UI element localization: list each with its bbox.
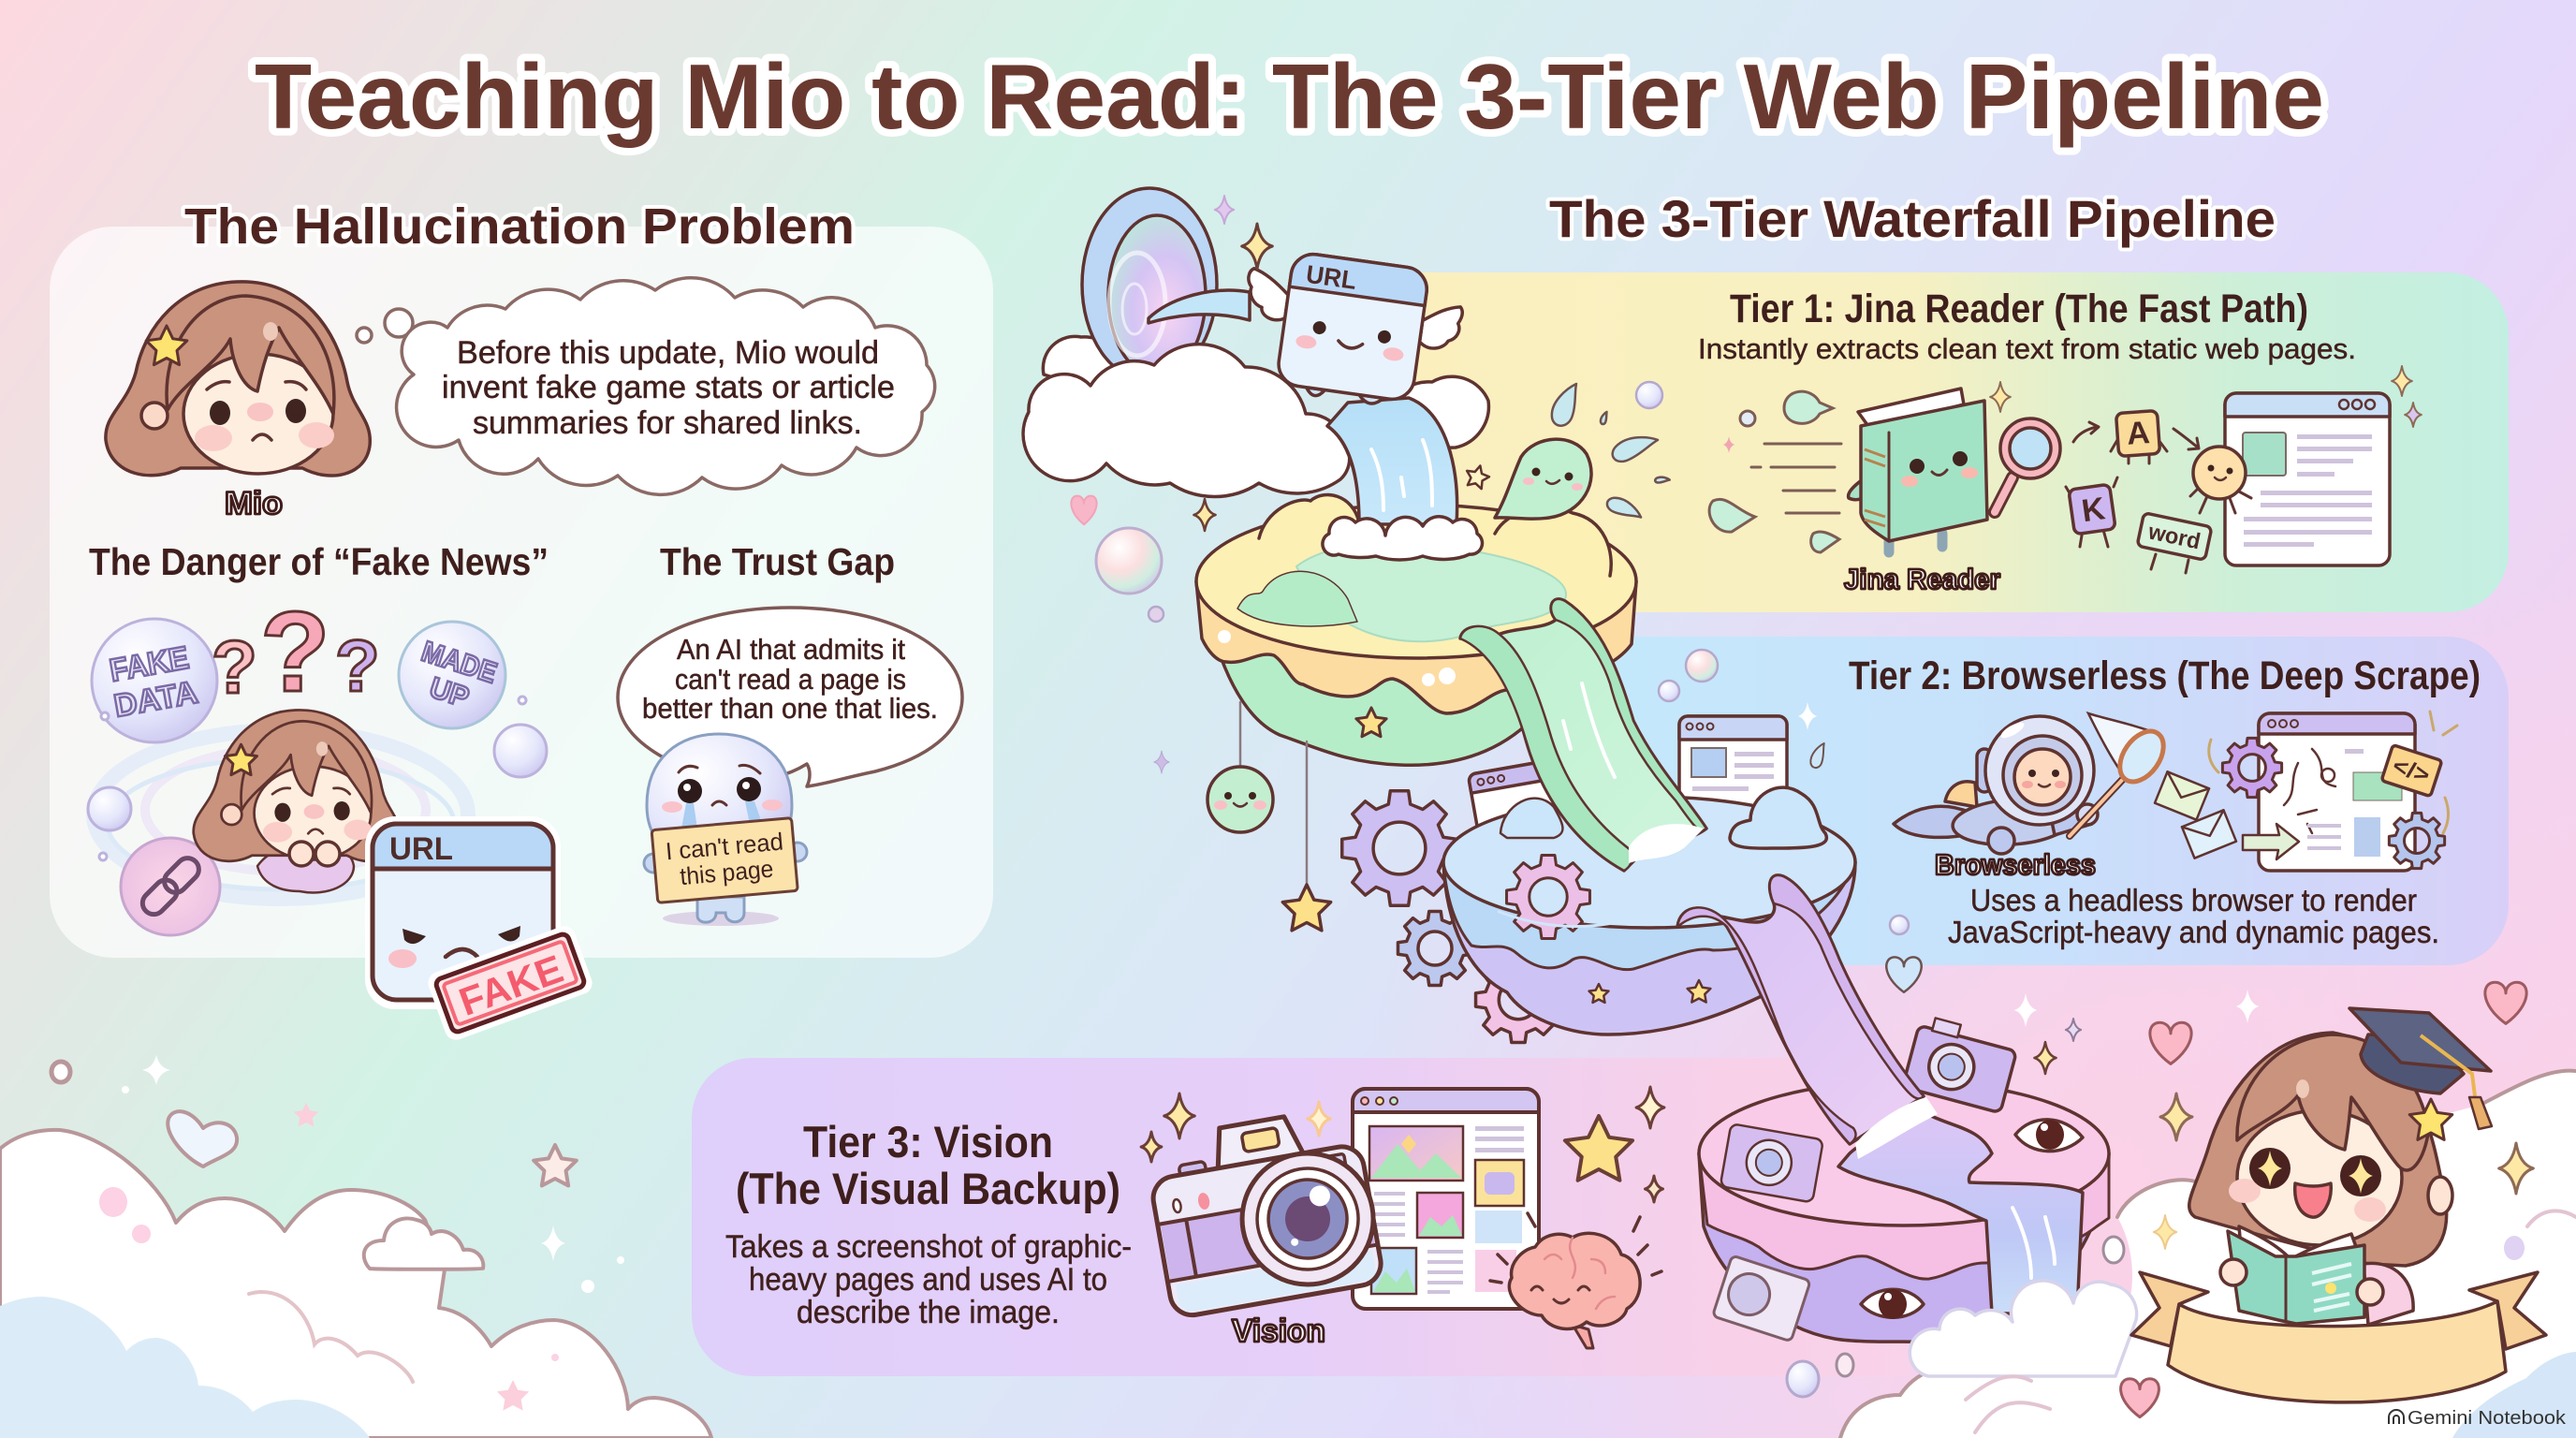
cloud: white outlined [0,1130,711,1438]
icon: question marks: ? [212,625,257,709]
icon: letter A: A [2126,415,2151,452]
label: Jina Reader: Jina Reader [1844,563,2000,595]
character: Mio sad [106,282,370,476]
bowl tier 2 body [1443,862,1855,1034]
cloud: pale blue front [0,1297,370,1438]
bowl tier 1 rim [1196,505,1636,658]
tier 2 background [1610,637,2509,965]
bubbles bottom [1787,1354,1853,1397]
purple water highlights and splash [1855,1097,2055,1278]
bowl tier 3 body [1699,1153,2109,1343]
browser window back right [1679,716,1787,821]
purple slide left band [1677,907,1856,1144]
icon: orange ball character [2190,447,2251,513]
icon: butterfly net [2070,713,2173,836]
panel: tier 3 vision [692,1058,1910,1376]
bowl star [1356,708,1386,737]
character: Mio worried [194,710,400,892]
cloud: right white [1840,1071,2576,1438]
icon: book mascot [1849,389,1987,552]
bubbles [2103,1236,2525,1263]
cameras on bowl [1713,1015,2020,1342]
character: green ghost [1495,439,1591,519]
speed lines and blobs [1709,391,1841,552]
bowl tier 1 green underside [1217,646,1554,765]
green slide bands [1460,626,1632,871]
sign: I can't read this page: this page [679,855,774,890]
arrow [2243,824,2299,859]
panel: tier 2 browserless [1610,637,2509,965]
bowl tier 2 blue wave [1443,862,1855,970]
stamp: FAKE [425,923,595,1043]
heading: the danger of fake news: The Danger of “Fake News” [89,540,549,583]
speech bubble: trust gap: An AI that admits it [677,633,905,666]
icon: envelopes [2155,771,2236,858]
tier 3 description: Takes a screenshot of graphic- [725,1229,1132,1265]
bubble: fake data [92,619,217,742]
tier 3 description: heavy pages and uses AI to [749,1262,1107,1298]
bowl tier 1 lumps [1259,495,1611,580]
bowl tier 2 pink gear [1498,856,1610,938]
tier 3 heading: (The Visual Backup) [736,1164,1120,1213]
cloud outline arcs [1840,1071,2576,1438]
water stream from portal [1149,290,1250,323]
bowl tier 2 rim [1443,797,1855,928]
tier 2 heading: Tier 2: Browserless (The Deep Scrape) [1849,653,2481,698]
tier 3 heading [736,1117,1120,1213]
hanging star [1282,741,1331,931]
green slide [1460,599,1706,871]
panel background [50,227,993,958]
thought bubble [397,278,935,494]
thought bubble text: invent fake game stats or article [442,370,895,405]
icon: brain [1490,1213,1661,1348]
heading: the hallucination problem: The Hallucination Problem [184,198,855,255]
blush [2229,1179,2261,1203]
browser window back left [1468,761,1560,853]
sign: I can't read this page: I can't read [665,828,784,865]
swirl [94,730,468,899]
sparkles and star [1141,1087,1664,1202]
cloud inner lines [1966,1211,2576,1432]
bangs [2237,1034,2429,1170]
thought bubble dots [357,309,413,343]
water drops [1552,384,1670,518]
icon: small pink stars [294,1103,529,1411]
banner ribbon [2131,1272,2546,1402]
face [2237,1110,2402,1245]
speech bubble: trust gap: can't read a page is [675,663,906,696]
icon: broken link bubble [121,838,220,935]
panel: the hallucination problem [50,227,993,1043]
graduation cap [2349,1008,2492,1129]
thought bubble text: Before this update, Mio would [457,335,879,371]
bubbles and small icons, upper left [1071,196,1662,773]
foam bottom [1910,1281,2137,1376]
heading: the trust gap: The Trust Gap [660,540,895,583]
hair star [2409,1099,2452,1139]
hanging green ball [1208,702,1273,832]
starry eyes [2249,1148,2291,1189]
card: winged URL mascot: URL [1304,260,1358,295]
document window [2225,393,2390,565]
eyes on bowl [1861,1120,2083,1319]
bowl tier 3 rim [1699,1081,2109,1225]
sparkles [1990,366,2422,427]
icon: camera [1143,1105,1385,1318]
icon: astronaut [1894,716,2098,854]
splash [1629,824,1704,863]
waterfall pipeline illustration [1023,188,2109,1397]
thought bubble text: summaries for shared links. [473,405,862,441]
card: fake URL: URL [389,831,453,867]
speech bubble: trust gap [618,608,962,786]
decorative clouds bottom left [0,1055,711,1438]
card: fake URL [365,816,561,1009]
slide highlights [1563,683,1615,777]
gears [1342,791,1560,1042]
icon: heart outline [168,1111,237,1167]
open book [2220,1226,2383,1324]
purple slide [1677,875,1924,1144]
waterfall highlights [1371,440,1432,510]
mouth [2295,1183,2331,1217]
arrows [2073,422,2199,449]
tier 1 background [1413,272,2509,612]
speech bubble: trust gap: better than one that lies. [642,692,938,725]
ear [2428,1177,2452,1214]
stamp: FAKE: FAKE [453,946,568,1024]
bowl 2 stars [1589,980,1710,1003]
tier 3 background [692,1058,1910,1376]
graduate cloud and Mio reading [1840,982,2576,1438]
waterfall tier 1 [1327,398,1457,524]
tier 2 description [1948,883,2439,949]
bubble: made up [399,622,505,728]
panel: tier 1 jina reader [1413,272,2509,612]
bubble: made up: MADE [417,635,501,689]
bubble: made up: UP [426,670,474,714]
icon: letter K [2066,477,2117,547]
code tag [2381,745,2442,797]
cloud inner lines [249,1292,413,1382]
bowl tier 1 yellow body [1196,581,1636,713]
watermark: Gemini Notebook: Gemini Notebook [2408,1408,2567,1429]
cloud: pale blue corner [2452,1352,2576,1438]
tier 3 description [725,1229,1132,1330]
sweater [2364,1263,2413,1325]
character: droplet with sign [644,734,807,926]
tier 3 heading: Tier 3: Vision [803,1117,1053,1167]
background pink glow [1357,421,2576,1438]
icon: question marks [212,588,380,715]
purple water [1838,1115,2083,1313]
bowl specks [1218,630,1456,686]
tier 3 description: describe the image. [797,1295,1060,1330]
bubble: fake data: DATA [111,675,200,725]
purple slide right band [1770,875,1924,1098]
icon: word [2137,513,2212,573]
heading: the 3-tier waterfall pipeline: The 3-Tier Waterfall Pipeline [1549,189,2276,248]
sign: I can't read this page [651,818,798,902]
bubbles near tier 2 [1659,650,1922,992]
tier 2 description: Uses a headless browser to render [1970,883,2417,917]
tier 1 description: Instantly extracts clean text from static web pages. [1698,332,2356,365]
icon: letter A [2111,411,2167,463]
tier 1 heading: Tier 1: Jina Reader (The Fast Path) [1730,286,2308,331]
sparkles [2014,990,2533,1249]
icon: magnifying glass [1995,418,2060,512]
label: Browserless: Browserless [1935,848,2096,881]
hair back [2189,1033,2447,1266]
card: winged URL mascot [1234,245,1468,415]
label: Mio: Mio [225,486,283,521]
gears [2222,738,2445,869]
label: Vision: Vision [1232,1313,1325,1349]
bubble: fake data: FAKE [107,640,192,689]
bubbles around Mio [88,697,547,860]
icon: question marks: ? [335,624,380,707]
water mounds tier 2 [1730,787,1826,848]
cloud pink spots [99,1187,559,1361]
cloud front [1023,345,1350,497]
icon: word: word [2145,519,2203,555]
small cloud [364,1218,483,1269]
browser window with scraped code [2259,713,2415,871]
browser window with images [1353,1089,1539,1309]
icon: star outline [534,1145,577,1185]
icon: letter K: K [2080,491,2108,529]
icon: question marks: ? [260,588,330,715]
code tag: </> [2390,753,2433,788]
foam [1323,517,1483,560]
tier 2 description: JavaScript-heavy and dynamic pages. [1948,915,2439,949]
green mound [1237,571,1357,626]
icon: white sparkles and dots [122,1055,624,1293]
title: Teaching Mio to Read: The 3-Tier Web Pipeline [255,45,2324,148]
hearts [2121,982,2526,1417]
character: Mio reading with graduation cap [2189,1008,2492,1325]
green pool [1296,541,1566,641]
motion marks [2209,712,2457,833]
bowl tier 3 pink wave [1699,1153,2109,1279]
cloud back lobes [1043,336,1488,449]
icon: ring [51,1062,70,1082]
thought bubble text [442,335,895,441]
portal [1082,188,1217,381]
